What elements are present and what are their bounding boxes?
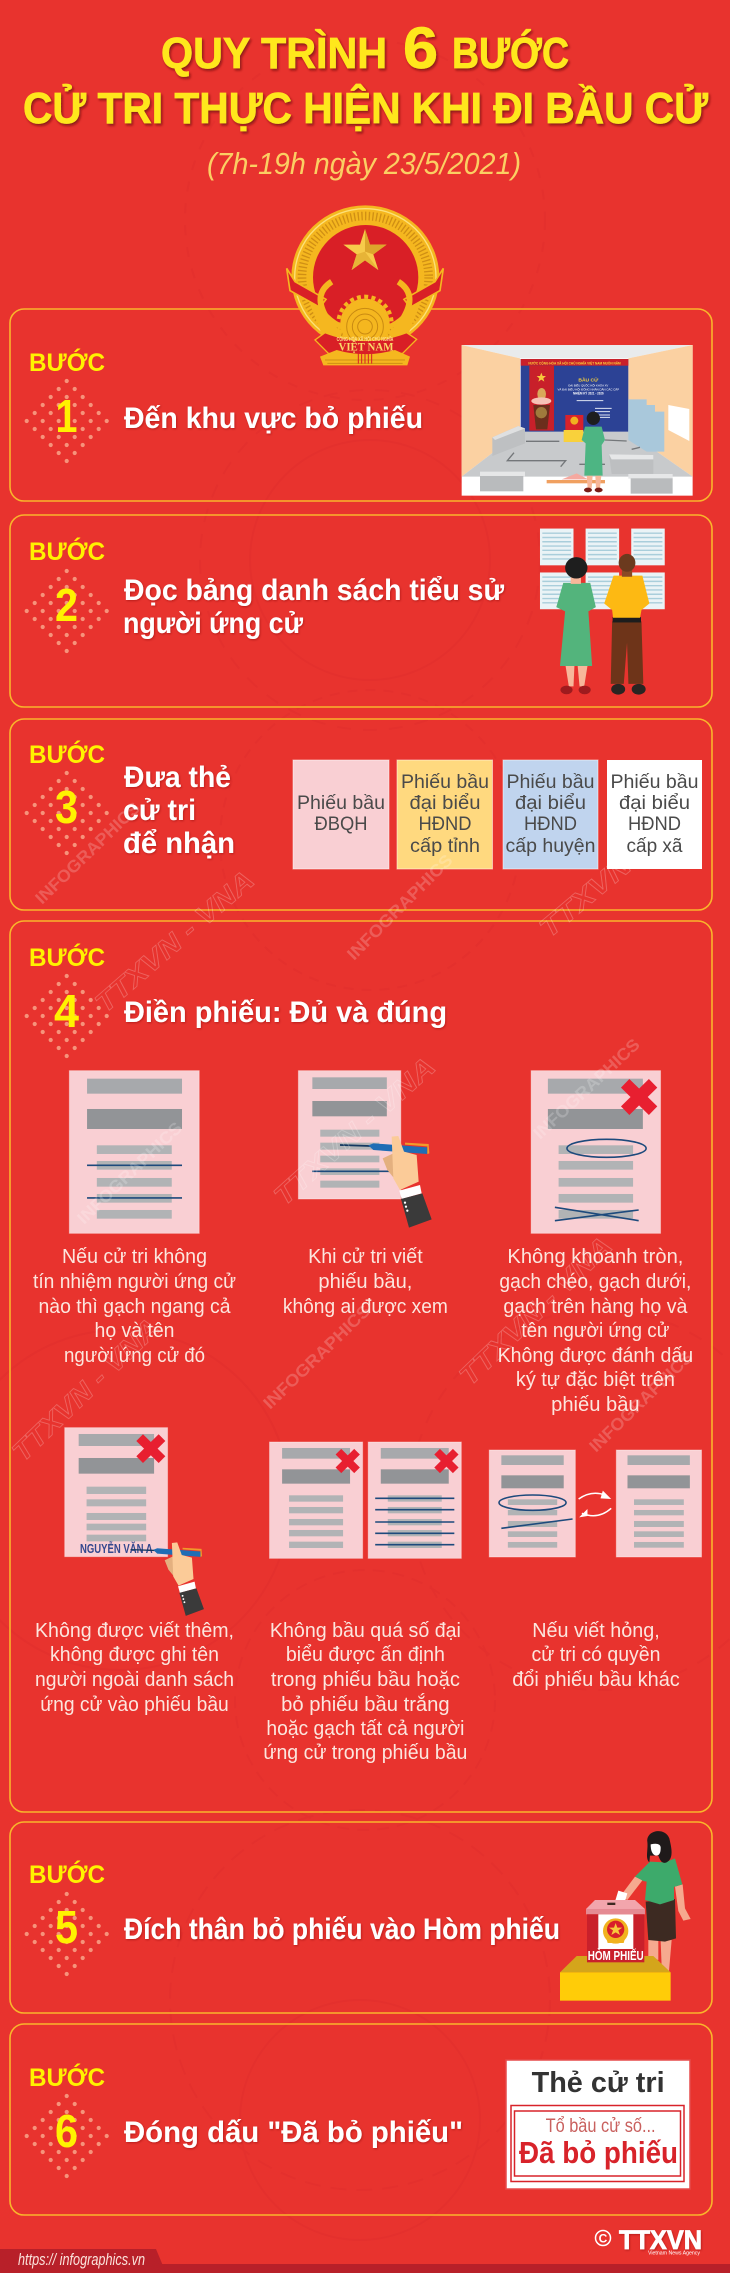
icon: hand with pen: [340, 1136, 432, 1228]
watermarks: INFOGRAPHICS: [343, 851, 457, 964]
step 6 number: [27, 2096, 107, 2176]
title: QUY TRÌNH: [161, 28, 387, 78]
ballot: province council: cấp tỉnh: [410, 836, 480, 857]
voter card with stamp: [506, 2060, 690, 2189]
watermarks: [6, 798, 697, 1467]
caption: vote limit: ứng cử trong phiếu bầu: [263, 1742, 467, 1764]
footer band: [0, 2249, 730, 2273]
panel: step 6: [10, 2024, 712, 2215]
step 1 number: 1: [56, 390, 78, 442]
step 1 text: Đến khu vực bỏ phiếu: [124, 402, 423, 435]
step 3 text: để nhận: [123, 827, 235, 860]
illustration: polling room: NHIỆM KỲ 2021 - 2026: [573, 391, 604, 396]
step 5 label: BƯỚC: [29, 1859, 105, 1889]
caption: exchange spoiled ballot: [512, 1620, 680, 1691]
panel: step 2: [10, 515, 712, 707]
ballot: district council: HĐND: [524, 814, 577, 835]
watermarks: TTXVN - VNA: [89, 865, 260, 1019]
ballot: commune council: đại biểu: [619, 793, 690, 814]
watermarks: TTXVN - VNA: [268, 1051, 441, 1211]
step 3 label: BƯỚC: [29, 739, 105, 769]
ballot: district council: cấp huyện: [506, 836, 596, 857]
caption: strike out candidate: Nếu cử tri không: [62, 1246, 207, 1268]
icon: hand with pen small: [130, 1542, 204, 1616]
ballot: added name: [65, 1428, 168, 1557]
step 4 number: [27, 976, 107, 1056]
step 6 label: BƯỚC: [29, 2062, 105, 2092]
ballot: province council: HĐND: [418, 814, 472, 835]
logo: TTXVN: Vietnam News Agency: [648, 2250, 701, 2256]
watermarks: TTXVN: [534, 850, 638, 944]
caption: exchange spoiled ballot: Nếu viết hỏng,: [532, 1620, 660, 1642]
step 6 number: 6: [55, 2105, 78, 2157]
ballot: commune council: cấp xã: [626, 836, 683, 857]
ballot: province council: [397, 760, 492, 869]
caption: strike out candidate: tín nhiệm người ứng cử: [33, 1271, 236, 1293]
voter card with stamp: Đã bỏ phiếu: [519, 2135, 678, 2170]
step 2 text: Đọc bảng danh sách tiểu sử: [124, 574, 504, 607]
step 1 number: [27, 381, 107, 461]
caption: prohibited marks: phiếu bầu: [551, 1394, 640, 1416]
step 2 label: BƯỚC: [29, 536, 105, 566]
icon: national emblem: CỘNG HÒA XÃ HỘI CHỦ NGHĨA: [337, 335, 393, 343]
caption: privacy: không ai được xem: [283, 1296, 448, 1318]
caption: exchange spoiled ballot: cử tri có quyền: [532, 1644, 660, 1666]
panel: step 3: [10, 719, 712, 910]
caption: prohibited marks: Không được đánh dấu: [498, 1345, 693, 1367]
ballot: prohibited marks: [531, 1071, 661, 1233]
ballot: all crossed out: [368, 1442, 461, 1558]
panel: step 5: [10, 1822, 712, 2013]
ballot: district council: đại biểu: [515, 793, 586, 814]
ballot: commune council: Phiếu bầu: [610, 772, 698, 793]
step 3 text: cử tri: [123, 794, 196, 827]
caption: privacy: [283, 1246, 448, 1318]
caption: prohibited marks: ký tự đặc biệt trên: [516, 1369, 675, 1391]
step 5 number: [27, 1894, 107, 1974]
illustration: polling room: BẦU CỬ: [578, 377, 599, 384]
logo: TTXVN: C: [599, 2232, 608, 2246]
watermarks: INFOGRAPHICS: [530, 1035, 644, 1143]
icon: national emblem: [287, 205, 443, 365]
logo: TTXVN: TTXVN: [619, 2225, 702, 2255]
ballot: private writing: [298, 1071, 401, 1199]
caption: privacy: Khi cử tri viết: [308, 1246, 423, 1268]
caption: exchange spoiled ballot: đổi phiếu bầu khác: [512, 1669, 680, 1691]
step 4 text: Điền phiếu: Đủ và đúng: [124, 996, 447, 1029]
step 5 text: Đích thân bỏ phiếu vào Hòm phiếu: [124, 1913, 560, 1946]
website url: https:// infographics.vn: [18, 2250, 145, 2269]
ballot name text: NGUYỄN VĂN A: [80, 1541, 153, 1556]
ballot: horizontal strike: [69, 1071, 199, 1233]
title: [23, 16, 708, 133]
step 4 label: BƯỚC: [29, 942, 105, 972]
ballot: national assembly: Phiếu bầu: [297, 793, 385, 814]
ballot: national assembly: ĐBQH: [314, 814, 368, 835]
ballot: district council: [503, 760, 598, 869]
step 3 text: [123, 761, 235, 860]
caption: no additional writing: người ngoài danh sách: [35, 1669, 234, 1691]
panel: step 4: [10, 921, 712, 1812]
ballots row one: [69, 1071, 661, 1233]
icon: national emblem: VIỆT NAM: [338, 340, 393, 354]
ballot: district council: Phiếu bầu: [506, 772, 594, 793]
caption: prohibited marks: Không khoanh tròn,: [507, 1246, 683, 1268]
ballot: commune council: HĐND: [628, 814, 681, 835]
caption: prohibited marks: tên người ứng cử: [521, 1320, 669, 1342]
step 3 number: [27, 773, 107, 853]
step 6 text: Đóng dấu "Đã bỏ phiếu": [124, 2116, 463, 2149]
caption: vote limit: [263, 1620, 467, 1764]
watermarks: INFOGRAPHICS: [260, 1301, 374, 1413]
ballot: commune council: [607, 760, 702, 869]
watermarks: INFOGRAPHICS: [74, 1118, 186, 1228]
caption: prohibited marks: gạch trên hàng họ và: [503, 1296, 688, 1318]
caption: privacy: phiếu bầu,: [318, 1271, 412, 1293]
ballot: province council: đại biểu: [410, 793, 480, 814]
caption: vote limit: hoặc gạch tất cả người: [266, 1718, 464, 1740]
caption: no additional writing: ứng cử vào phiếu bầu: [40, 1694, 229, 1716]
ballot: replacement: [616, 1450, 702, 1557]
caption: no additional writing: Không được viết thêm,: [35, 1620, 234, 1642]
step 5 number: 5: [55, 1901, 78, 1953]
title: BƯỚC: [452, 28, 569, 78]
ballot box label: HÒM PHIẾU: [588, 1948, 644, 1963]
caption: strike out candidate: [33, 1246, 236, 1367]
panel: step 1: [10, 309, 712, 501]
watermarks: TTXVN - VNA: [453, 1231, 618, 1391]
illustration: reading candidate list: [540, 529, 665, 695]
arrows: swap ballot: [579, 1491, 611, 1517]
ballots row two: [65, 1428, 702, 1558]
step 3 text: Đưa thẻ: [124, 761, 231, 794]
caption: vote limit: trong phiếu bầu hoặc: [271, 1669, 460, 1691]
caption: strike out candidate: họ và tên: [94, 1320, 174, 1342]
ballot: spoiled: [489, 1450, 575, 1557]
title: 6: [403, 16, 438, 81]
step 2 text: [123, 574, 504, 640]
caption: vote limit: biểu được ấn định: [286, 1644, 445, 1666]
step 3 number: 3: [55, 781, 78, 833]
illustration: polling room: VÀ ĐẠI BIỂU HỘI ĐỒNG NHÂN DÂN CÁC CẤP: [557, 386, 619, 391]
caption: strike out candidate: nào thì gạch ngang cả: [38, 1296, 231, 1318]
caption: prohibited marks: gạch chéo, gạch dưới,: [499, 1271, 691, 1293]
step 1 label: BƯỚC: [29, 347, 105, 377]
watermarks: INFOGRAPHICS: [586, 1348, 697, 1456]
voter card with stamp: Tổ bầu cử số...: [546, 2116, 656, 2137]
step 2 number: 2: [55, 579, 78, 631]
illustration: polling room: NƯỚC CỘNG HÒA XÃ HỘI CHỦ NGHĨA VIỆT NAM MUÔN NĂM: [528, 360, 621, 365]
subtitle: date and time: (7h-19h ngày 23/5/2021): [207, 146, 521, 181]
voter card with stamp: Thẻ cử tri: [532, 2067, 665, 2099]
illustration: woman casting ballot: [560, 1831, 691, 2001]
step 2 text: người ứng cử: [123, 607, 303, 640]
watermarks: INFOGRAPHICS: [32, 798, 144, 908]
illustration: polling room: ĐẠI BIỂU QUỐC HỘI KHÓA XV: [568, 382, 608, 387]
watermarks: TTXVN - VNA: [6, 1312, 165, 1467]
ballot: blank vote: [270, 1442, 363, 1558]
step 2 number: [27, 571, 107, 651]
caption: no additional writing: [35, 1620, 234, 1716]
caption: vote limit: Không bầu quá số đại: [270, 1620, 461, 1642]
caption: vote limit: bỏ phiếu bầu trắng: [281, 1693, 450, 1716]
caption: prohibited marks: [498, 1246, 693, 1416]
ballot: national assembly: [293, 760, 389, 869]
caption: no additional writing: không được ghi tên: [50, 1644, 219, 1666]
illustration: polling room: [462, 345, 693, 496]
step 4 number: 4: [54, 985, 79, 1037]
ballot: province council: Phiếu bầu: [401, 772, 489, 793]
caption: strike out candidate: người ứng cử đó: [64, 1345, 205, 1367]
